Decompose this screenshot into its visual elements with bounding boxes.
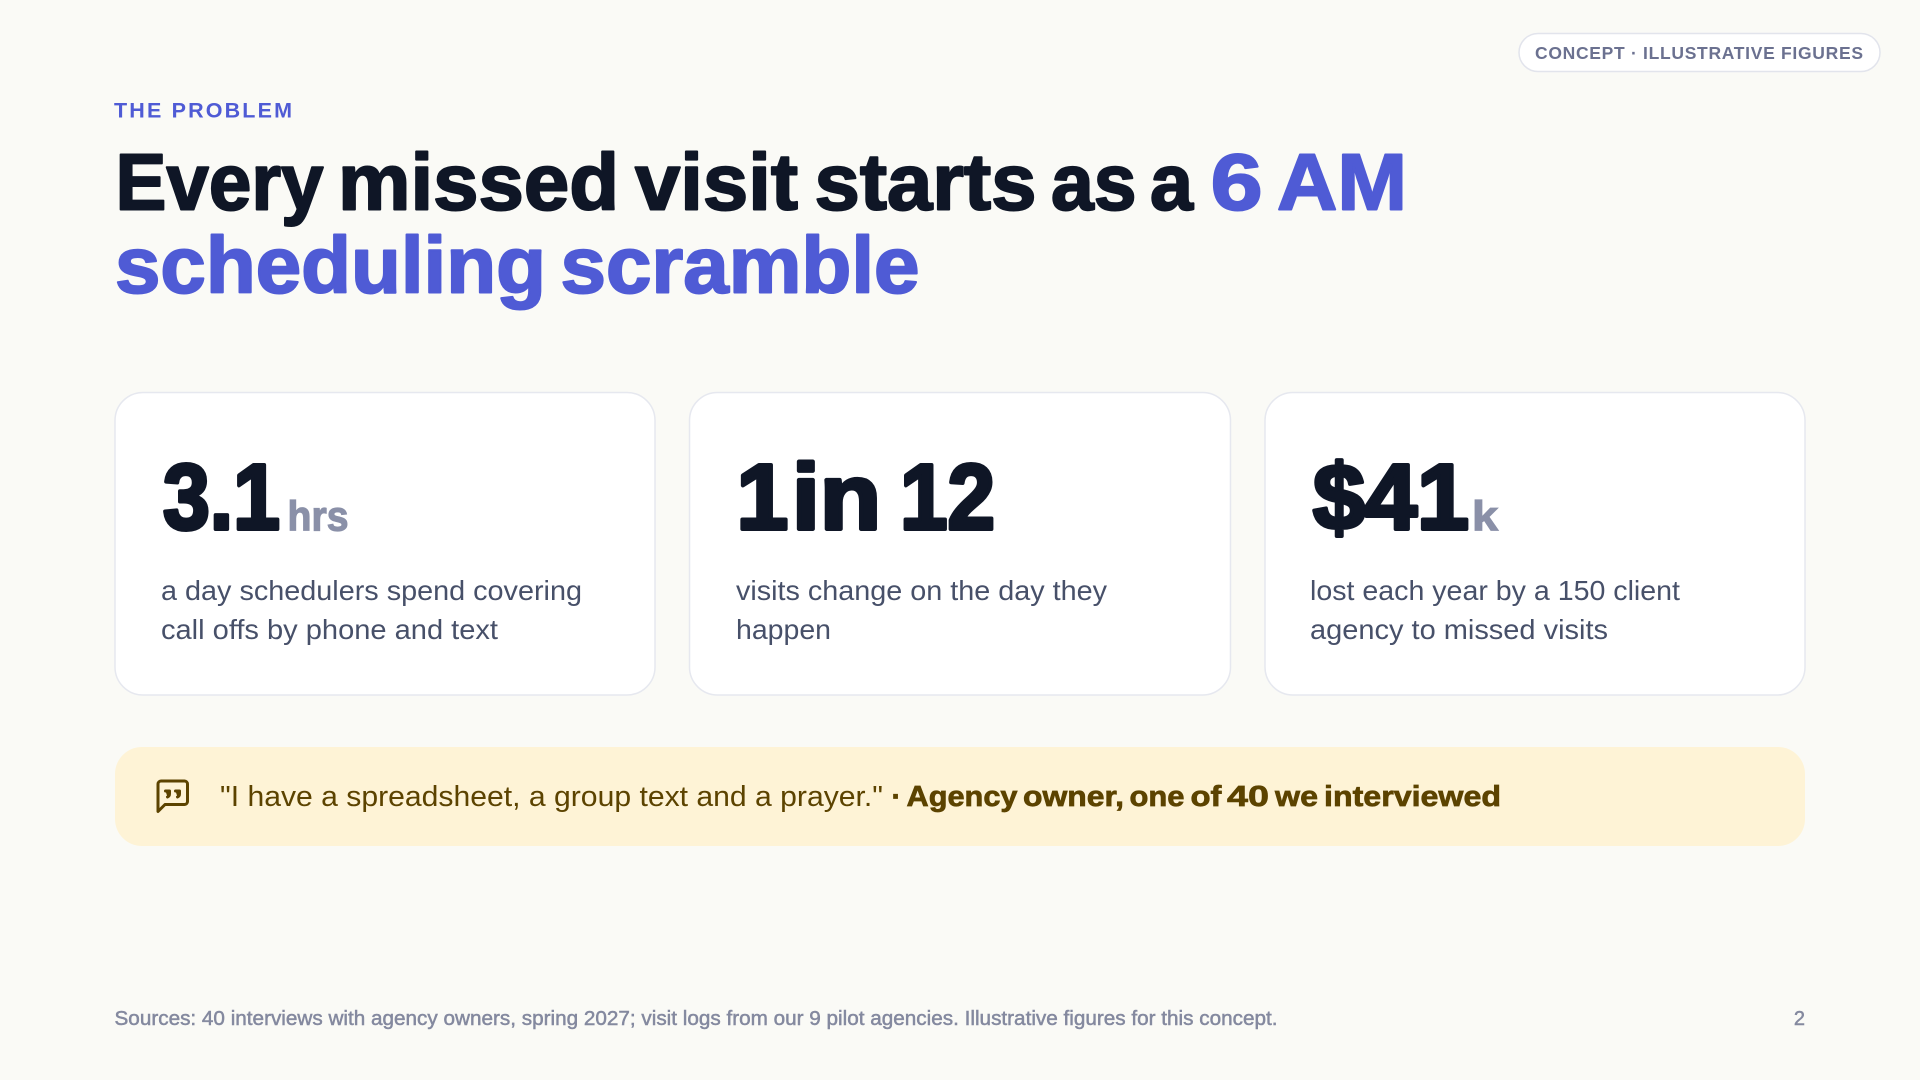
page number: 2 [1794,1008,1805,1030]
stat: 3.1 hrs: hrs [288,492,348,540]
stat: $41k: k [1472,492,1499,540]
title: scramble [560,220,920,310]
title: visit [635,138,798,226]
stat: 1 in 12 [736,445,995,549]
stat description: a day schedulers spend covering [161,575,582,606]
quote attribution: of [1190,781,1222,813]
title: Every [116,138,324,226]
stat: 3.1 hrs: 3.1 [163,445,280,549]
icon: speech bubble with quotes [158,781,188,812]
title: scheduling [115,220,546,310]
panel: stat card hours [115,392,655,695]
title: AM [1277,138,1407,226]
quote attribution: · [892,781,901,813]
quote attribution: Agency [906,781,1018,813]
stat description: call offs by phone and text [161,614,498,645]
eyebrow: the problem: THE PROBLEM [114,98,292,122]
panel: stat card cost [1265,392,1805,695]
concept badge [1519,34,1880,72]
stat description [1310,575,1680,645]
quote attribution: one [1130,781,1184,813]
title: as [1051,138,1136,226]
stat description: happen [736,614,831,645]
quote attribution [892,781,1501,813]
stat description: visits change on the day they [736,575,1107,606]
concept badge: CONCEPT · ILLUSTRATIVE FIGURES [1535,43,1863,63]
quote attribution: owner, [1023,781,1124,813]
stat description: agency to missed visits [1310,614,1608,645]
stat: 1 in 12: 12 [900,445,995,549]
stat: 1 in 12: 1 [736,445,788,549]
title: 6 [1211,138,1263,226]
quote attribution: interviewed [1324,781,1501,813]
stat: $41k: $41 [1313,445,1469,549]
title: a [1150,138,1193,226]
stat description [161,575,582,645]
title: starts [814,138,1036,226]
quote attribution: we [1274,781,1318,813]
stat description: lost each year by a 150 client [1310,575,1680,606]
quote attribution: 40 [1227,781,1269,813]
stat: 3.1 hrs [163,445,348,549]
callout: customer quote [115,747,1805,846]
title [115,138,1407,310]
title: missed [338,138,619,226]
stat description [736,575,1107,645]
quote text: "I have a spreadsheet, a group text and a prayer." [220,781,883,813]
footer: sources: Sources: 40 interviews with agency owners, spring 2027; visit logs from our 9 pilot agencies. Illustrative figures for this concept. [114,1008,1278,1030]
panel: stat card visits [690,392,1230,695]
stat: 1 in 12: in [792,445,881,549]
